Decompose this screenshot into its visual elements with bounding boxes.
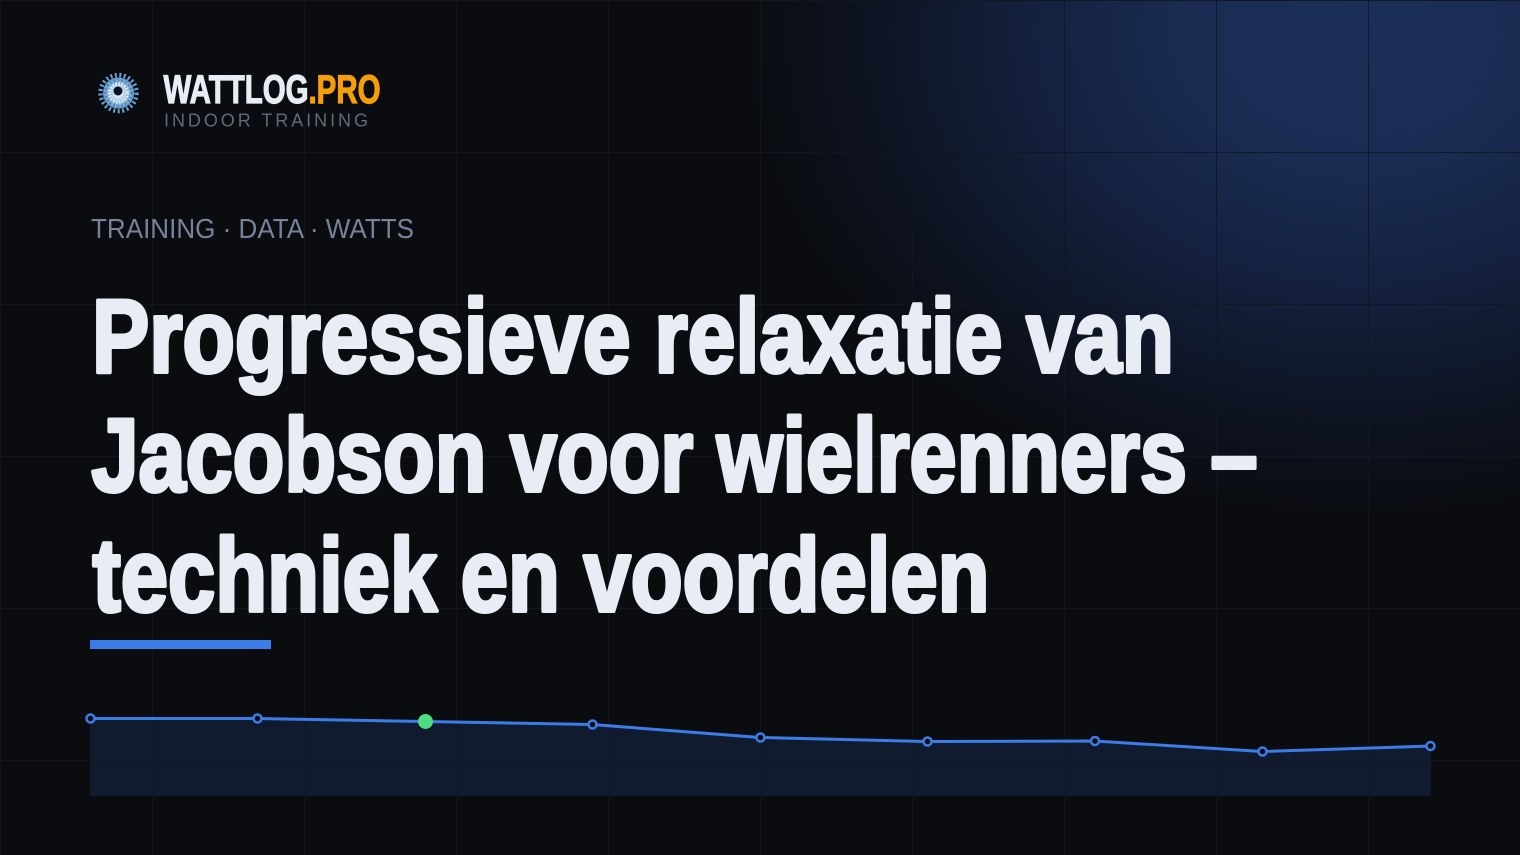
title accent underline bbox=[90, 640, 271, 649]
chart line bbox=[90, 718, 1431, 752]
title bbox=[92, 279, 1258, 634]
chart highlighted point bbox=[418, 714, 433, 729]
title: Progressieve relaxatie van bbox=[92, 279, 1174, 395]
line chart bbox=[86, 714, 1434, 756]
chart data points bbox=[86, 714, 1434, 756]
title: Jacobson voor wielrenners – bbox=[92, 398, 1258, 514]
line chart area fill bbox=[90, 718, 1431, 796]
title: techniek en voordelen bbox=[92, 518, 990, 634]
icon: cycling cassette logo bbox=[100, 75, 136, 111]
logo tagline: INDOOR TRAINING bbox=[164, 110, 368, 130]
eyebrow text: TRAINING · DATA · WATTS bbox=[91, 213, 414, 244]
logo wordmark: WATTLOG.PRO bbox=[164, 68, 380, 112]
